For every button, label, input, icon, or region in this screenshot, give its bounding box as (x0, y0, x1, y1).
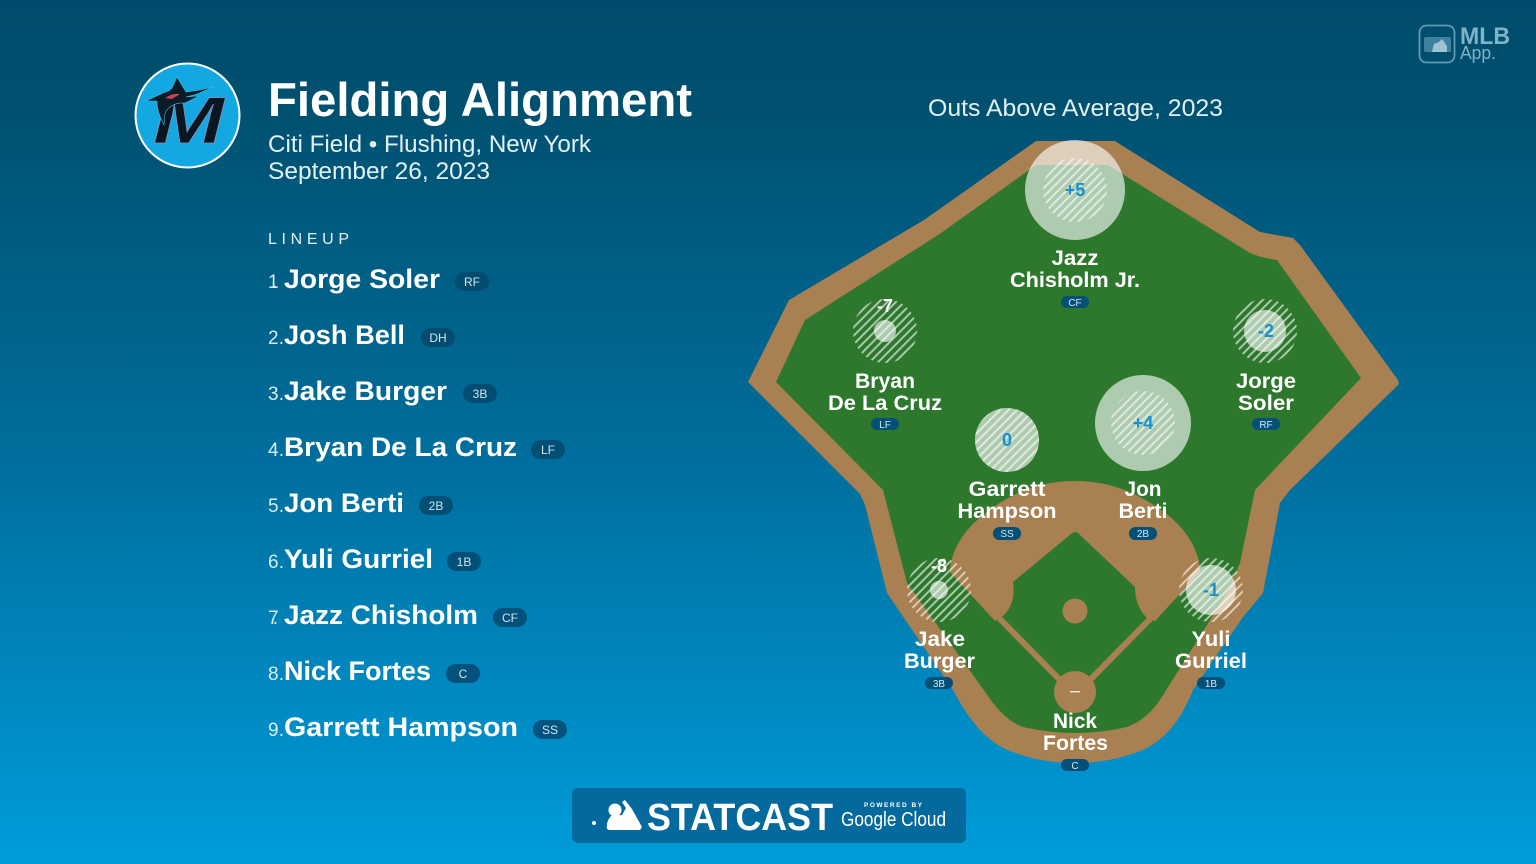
label: Jorge Soler: RF (1259, 420, 1273, 431)
lineup row 5 (268, 488, 453, 518)
infield dirt (950, 481, 1200, 673)
label: Nick Fortes: Fortes (1043, 732, 1108, 755)
lineup row 5: Jon Berti (284, 488, 404, 518)
lineup row 2: Josh Bell (284, 320, 405, 350)
label: Jorge Soler: Jorge (1236, 370, 1296, 393)
label: Jon Berti: 2B (1137, 529, 1149, 540)
label: Jake Burger: Jake (915, 628, 965, 651)
marker: first base -1: -1 (1203, 580, 1219, 600)
lineup row 6 (268, 544, 481, 574)
label: Nick Fortes (1043, 710, 1108, 772)
lineup row 5: 5. (268, 496, 284, 517)
lineup row 6: Yuli Gurriel (284, 544, 433, 574)
marker: left field -7: -7 (877, 296, 893, 316)
label: Nick Fortes: C (1071, 761, 1079, 772)
lineup row 6: 6. (268, 552, 284, 573)
icon: batter silhouette (607, 800, 642, 830)
lineup row 7: Jazz Chisholm (284, 600, 478, 630)
marker: second base +4: +4 (1133, 413, 1153, 433)
lineup row 9: Garrett Hampson (284, 712, 518, 742)
label: Yuli Gurriel (1175, 628, 1247, 690)
home plate circle (1054, 671, 1096, 713)
lineup row 8: C (459, 667, 468, 681)
powered by: POWERED BY (864, 802, 923, 809)
lineup row 8: 8. (268, 664, 284, 685)
label: Jazz Chisholm Jr.: CF (1068, 298, 1082, 309)
lineup row 4: LF (541, 443, 555, 457)
lineup row 7: 7. (268, 608, 279, 629)
label: Yuli Gurriel: 1B (1205, 679, 1217, 690)
venue: Citi Field • Flushing, New York (268, 131, 592, 158)
heading: Fielding Alignment (268, 73, 692, 126)
label: Jazz Chisholm Jr. (1010, 247, 1140, 309)
marker: right field -2: -2 (1258, 321, 1274, 341)
label: Bryan De La Cruz (828, 370, 942, 431)
marker: left field -7 (853, 296, 917, 363)
label: Garrett Hampson: Garrett (968, 478, 1046, 501)
label: Jorge Soler: Soler (1238, 392, 1294, 415)
label: Bryan De La Cruz: LF (879, 420, 891, 431)
google cloud: Google Cloud (841, 809, 946, 831)
lineup row 8 (268, 656, 480, 686)
lineup row 2: 2. (268, 328, 284, 349)
lineup row 4: Bryan De La Cruz (284, 432, 517, 462)
label: Jorge Soler (1236, 370, 1296, 431)
label: Jon Berti (1118, 478, 1168, 540)
catcher value (1070, 691, 1080, 692)
pitcher's mound (1062, 598, 1088, 624)
warning track dirt (748, 141, 1399, 763)
label: Jazz Chisholm Jr.: Chisholm Jr. (1010, 269, 1140, 292)
lineup row 9: SS (542, 723, 558, 737)
team logo: Marlins: M (153, 83, 227, 157)
label: Yuli Gurriel: Gurriel (1175, 650, 1247, 673)
MLB App logo: App. (1460, 43, 1496, 63)
lineup row 1: Jorge Soler (284, 264, 441, 294)
label: Jon Berti: Jon (1124, 478, 1162, 501)
label: Yuli Gurriel: Yuli (1192, 628, 1230, 651)
lineup row 2: DH (429, 331, 447, 345)
baseball field diagram (748, 140, 1399, 772)
lineup row 3: Jake Burger (284, 376, 448, 406)
lineup row 3: 3B (473, 387, 487, 401)
marker: center field +5: +5 (1065, 180, 1085, 200)
foul lines (999, 618, 1151, 680)
label: Jake Burger: Burger (904, 650, 975, 673)
date: September 26, 2023 (268, 158, 490, 185)
lineup heading: LINEUP (268, 231, 349, 248)
label: Jake Burger (904, 628, 975, 690)
infield grass (1004, 532, 1146, 673)
lineup row 7: CF (502, 611, 518, 625)
label: Bryan De La Cruz: De La Cruz (828, 392, 942, 415)
label: Jon Berti: Berti (1118, 500, 1168, 523)
lineup row 9: 9. (268, 720, 284, 741)
chart heading: outs above average: Outs Above Average, 2023 (928, 95, 1223, 122)
label: Jazz Chisholm Jr.: Jazz (1052, 247, 1098, 270)
marker: shortstop 0: 0 (1002, 430, 1012, 450)
lineup row 1 (268, 264, 489, 294)
lineup row 8: Nick Fortes (284, 656, 431, 686)
lineup row 3: 3. (268, 384, 284, 405)
lineup list (268, 231, 567, 742)
statcast badge (572, 788, 966, 843)
statcast wordmark: STATCAST (647, 797, 833, 839)
marker: third base -8: -8 (931, 556, 947, 576)
MLB App logo (1420, 23, 1510, 63)
lineup row 5: 2B (429, 499, 443, 513)
marker: shortstop 0 (975, 408, 1039, 472)
marker: third base -8 (907, 556, 971, 622)
lineup row 6: 1B (457, 555, 471, 569)
lineup row 1: 1. (268, 272, 279, 293)
lineup row 2 (268, 320, 455, 350)
marker: right field -2 (1233, 299, 1297, 363)
marker: center field +5 (1025, 140, 1125, 240)
MLB App logo: MLB (1460, 23, 1510, 50)
title block (268, 73, 692, 185)
lineup row 4: 4. (268, 440, 284, 461)
label: Bryan De La Cruz: Bryan (855, 370, 915, 393)
label: Garrett Hampson (958, 478, 1056, 540)
label: Jake Burger: 3B (933, 679, 945, 690)
lineup row 1: RF (464, 275, 480, 289)
outfield grass (776, 165, 1361, 733)
label: Garrett Hampson: SS (1000, 529, 1014, 540)
label: Nick Fortes: Nick (1053, 710, 1097, 733)
marker: second base +4 (1095, 375, 1191, 471)
lineup row 3 (268, 376, 497, 406)
team logo: Marlins (136, 64, 240, 168)
label: Garrett Hampson: Hampson (958, 500, 1056, 523)
marker: first base -1 (1179, 558, 1243, 622)
